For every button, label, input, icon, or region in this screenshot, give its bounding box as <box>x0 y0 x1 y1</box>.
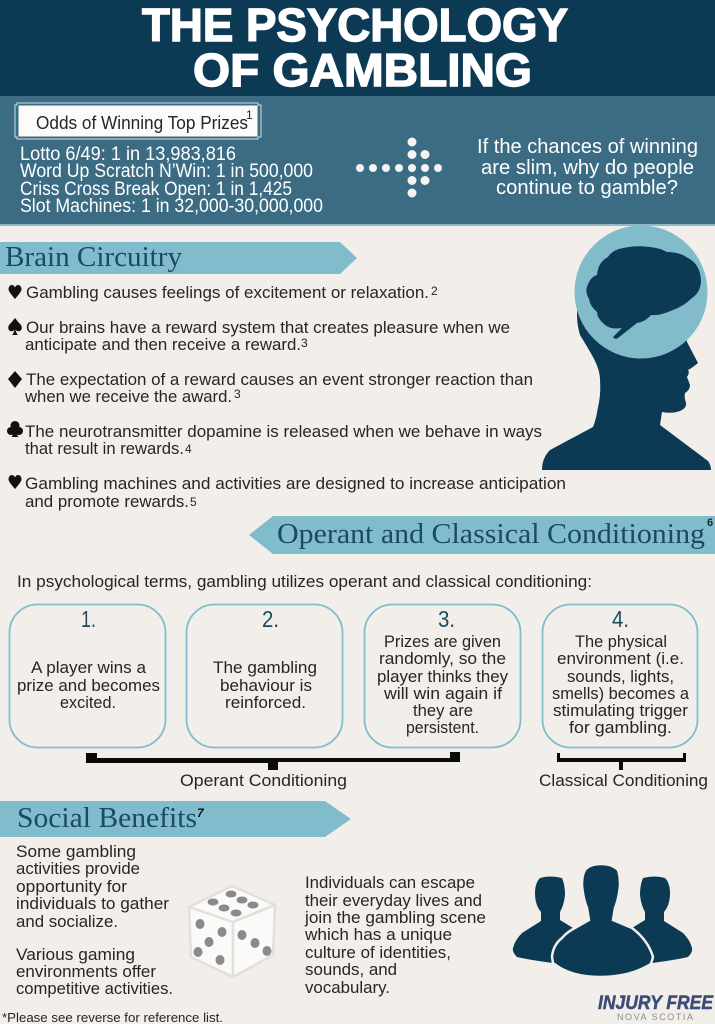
panel: odds of winning <box>0 96 715 226</box>
social text: right: their everyday lives and <box>305 892 482 910</box>
card 3: they are <box>413 702 473 720</box>
heading: operant and classical conditioning: 6 <box>707 517 713 529</box>
social text: left <box>16 843 173 998</box>
odds heading box: 1 <box>246 108 253 122</box>
odds heading box: Odds of Winning Top Prizes <box>36 113 248 133</box>
card 3: will win again if <box>383 685 502 703</box>
card 4: sounds, lights, <box>567 668 674 686</box>
card 4: The physical <box>575 633 667 651</box>
card 3: player thinks they <box>377 668 509 686</box>
card 3: randomly, so the <box>379 650 506 668</box>
social text: right: vocabulary. <box>305 979 390 997</box>
question text: are slim, why do people <box>481 157 694 179</box>
icon: people <box>513 864 692 977</box>
title: THE PSYCHOLOGY <box>142 0 568 51</box>
card 3: Prizes are given <box>384 633 501 651</box>
bullet: feelings: 2 <box>431 284 438 298</box>
social text: left: activities provide <box>16 860 140 878</box>
heading: brain circuitry: Brain Circuitry <box>5 242 182 273</box>
operant conditioning bracket <box>86 752 460 790</box>
heading: operant and classical conditioning: Operant and Classical Conditioning <box>277 518 705 550</box>
heading: social benefits: 7 <box>197 806 205 820</box>
card 4: for gambling. <box>569 719 672 737</box>
intro text: In psychological terms, gambling utilizes operant and classical conditioning: <box>17 573 592 591</box>
card 2 <box>186 604 342 748</box>
social text: left: environments offer <box>16 963 157 981</box>
odds heading box <box>15 103 261 139</box>
logo: injury free nova scotia: NOVA SCOTIA <box>617 1012 693 1022</box>
question text: If the chances of winning <box>477 136 698 158</box>
bullet: dopamine: 4 <box>185 442 192 456</box>
classical conditioning bracket <box>539 753 708 790</box>
bullet: reward system <box>8 318 510 354</box>
heading: brain circuitry <box>0 242 357 274</box>
card 2: behaviour is <box>220 677 312 695</box>
odds list: Slot Machines: 1 in 32,000-30,000,000 <box>20 196 323 217</box>
card 2: The gambling <box>213 659 317 677</box>
card 1: 1. <box>81 606 96 632</box>
bullet: expectation <box>8 371 533 406</box>
odds list: Word Up Scratch N’Win: 1 in 500,000 <box>20 161 313 182</box>
card 4: 4. <box>612 606 629 632</box>
title: OF GAMBLING <box>193 44 532 96</box>
operant conditioning bracket: Operant Conditioning <box>180 772 347 790</box>
card 2: 2. <box>262 606 279 632</box>
heading: social benefits: Social Benefits <box>17 803 197 834</box>
bullet: reward system: Our brains have a reward system that creates pleasure when we <box>26 319 510 337</box>
title <box>142 0 568 96</box>
icon: head with brain <box>542 226 711 470</box>
social text: right: sounds, and <box>305 961 397 979</box>
brain circuitry list <box>7 284 566 511</box>
icon: dice <box>189 886 275 977</box>
social text: right <box>304 874 486 997</box>
social text: left: individuals to gather <box>16 895 170 913</box>
bullet: expectation: when we receive the award. <box>24 388 232 406</box>
social text: right: Individuals can escape <box>305 874 475 892</box>
odds list: Lotto 6/49: 1 in 13,983,816 <box>20 144 236 165</box>
bullet: reward system: anticipate and then receive a reward. <box>25 336 301 354</box>
bullet: machines: and promote rewards. <box>25 493 189 511</box>
card 2: reinforced. <box>225 694 306 712</box>
card 1 <box>10 604 166 748</box>
classical conditioning bracket: Classical Conditioning <box>539 772 708 790</box>
title banner <box>0 0 715 96</box>
question text <box>477 136 698 199</box>
bullet: dopamine: The neurotransmitter dopamine is released when we behave in ways <box>25 423 542 441</box>
social text: left: Various gaming <box>16 946 135 964</box>
question text: continue to gamble? <box>496 177 678 199</box>
card 3: persistent. <box>406 719 479 737</box>
social text: right: culture of identities, <box>305 944 451 962</box>
heading: social benefits <box>0 801 351 837</box>
card 3: 3. <box>438 606 455 632</box>
bullet: expectation: The expectation of a reward causes an event stronger reaction than <box>26 371 533 389</box>
bullet: feelings: Gambling causes feelings of excitement or relaxation. <box>26 284 429 302</box>
card 4: stimulating trigger <box>553 702 689 720</box>
odds list <box>20 144 323 217</box>
bullet: reward system: 3 <box>301 336 308 350</box>
card 1: prize and becomes <box>17 677 160 695</box>
bullet: dopamine <box>7 421 542 458</box>
arrow: dotted <box>356 138 442 198</box>
bullet: machines: Gambling machines and activities are designed to increase anticipation <box>25 475 566 493</box>
card 4 <box>542 604 698 748</box>
bullet: dopamine: that result in rewards. <box>25 440 184 458</box>
card 1: excited. <box>60 694 116 712</box>
social text: left: opportunity for <box>16 878 128 896</box>
bullet: expectation: 3 <box>234 387 241 401</box>
social text: left: competitive activities. <box>16 980 173 998</box>
social text: left: Some gambling <box>16 843 136 861</box>
card 1: A player wins a <box>31 659 147 677</box>
card 4: smells) becomes a <box>552 685 690 703</box>
social text: left: and socialize. <box>16 913 118 931</box>
bullet: machines: 5 <box>190 495 197 509</box>
card 4: environment (i.e. <box>557 650 684 668</box>
social text: right: join the gambling scene <box>304 909 486 927</box>
odds list: Criss Cross Break Open: 1 in 1,425 <box>20 179 292 200</box>
bullet: machines <box>8 475 566 511</box>
social text: right: which has a unique <box>304 926 452 944</box>
card 3 <box>364 604 520 748</box>
